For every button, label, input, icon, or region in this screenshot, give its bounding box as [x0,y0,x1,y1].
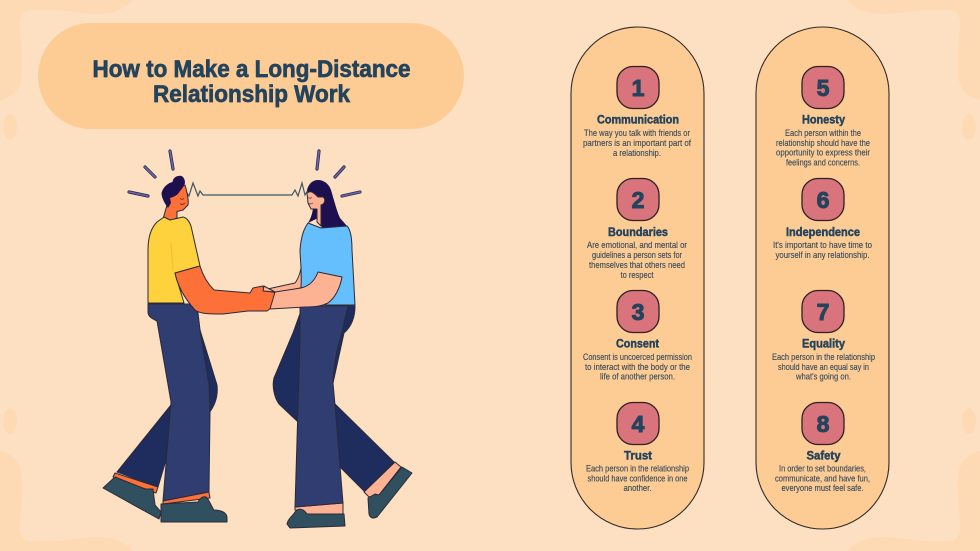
connection signal line [185,183,308,196]
item 7: equality: what's going on. [795,372,851,382]
item 2: boundaries: Boundaries [608,225,668,239]
item 3: consent: to interact with the body or the [585,362,690,372]
item 8: safety: everyone must feel safe. [782,483,864,493]
item 7: equality: Equality [802,337,845,351]
panel: items 1 to 4 [571,27,704,529]
man arm and hand [175,266,276,314]
item 3: consent: Consent [616,337,659,351]
item 2: boundaries: guidelines a person sets for [592,250,682,260]
woman face and neck [307,192,325,226]
item 2: boundaries: 2 [632,187,644,213]
item 5: honesty: Honesty [802,112,845,126]
man eye and smile [180,198,185,204]
title banner: How to Make a Long-Distance [92,56,410,83]
item 3: consent: Consent is uncoerced permission [583,352,692,362]
item 3: consent: 3 [632,299,644,325]
item 2: boundaries: to respect [620,270,654,280]
man front sock and shoe [163,492,210,504]
item 5: honesty [776,66,870,167]
item 2: boundaries [587,178,687,280]
man shirt [148,217,200,303]
man hair [162,176,185,208]
item 7: equality: Each person in the relationship [772,352,875,362]
title banner: Relationship Work [153,81,351,108]
woman back sock and shoe [364,462,401,497]
item 5: honesty: relationship should have the [776,138,870,148]
item 6: independence: yourself in any relationship. [776,250,870,260]
man back sock and shoe [113,473,158,493]
woman back arm [263,262,305,293]
item 5: honesty: 5 [817,75,830,101]
emphasis rays [129,151,360,196]
woman eye and smile [308,198,313,204]
item 2: boundaries: themselves that others need [589,260,685,270]
man head [163,185,188,221]
item 1: communication: 1 [632,75,645,101]
item 6: independence: It's important to have time to [773,240,872,250]
item 8: safety: communicate, and have fun, [775,474,870,484]
woman arm [270,272,342,309]
woman hair [307,180,347,228]
item 8: safety [775,402,870,493]
illustration: couple holding hands [103,151,412,528]
item 6: independence [773,178,872,260]
woman hand on man's hand [263,286,275,292]
woman shirt [300,223,355,305]
item 1: communication: a relationship. [613,148,661,158]
item 4: trust [586,402,689,493]
man shirt sleeve fold [171,243,173,270]
item 5: honesty: opportunity to express their [776,148,870,158]
item 6: independence: 6 [817,187,829,213]
item 6: independence: Independence [786,225,860,239]
item 1: communication [583,66,691,158]
man back leg [117,405,172,487]
item 8: safety: 8 [817,411,830,437]
woman [263,180,412,528]
item 4: trust: another. [624,483,652,493]
item 4: trust: Each person in the relationship [586,464,689,474]
title banner [38,23,464,129]
man [103,176,276,522]
item 1: communication: partners is an important part of [583,138,691,148]
woman front leg [295,306,348,507]
man front leg [148,304,210,501]
item 4: trust: should have confidence in one [588,474,688,484]
item 4: trust: Trust [624,448,652,462]
item 1: communication: The way you talk with friends or [584,128,690,138]
item 8: safety: Safety [806,448,841,462]
item 3: consent [583,290,692,382]
item 7: equality: 7 [817,299,829,325]
item 8: safety: In order to set boundaries, [779,464,866,474]
woman back leg [273,308,305,421]
item 7: equality: should have an equal say in [778,362,869,372]
item 7: equality [772,290,875,382]
item 5: honesty: Each person within the [785,128,861,138]
item 4: trust: 4 [632,411,645,437]
item 5: honesty: feelings and concerns. [786,157,860,167]
panel: items 5 to 8 [756,27,889,529]
item 3: consent: life of another person. [600,372,675,382]
woman front sock and shoe [295,503,343,514]
item 2: boundaries: Are emotional, and mental or [587,240,687,250]
item 1: communication: Communication [597,112,679,126]
